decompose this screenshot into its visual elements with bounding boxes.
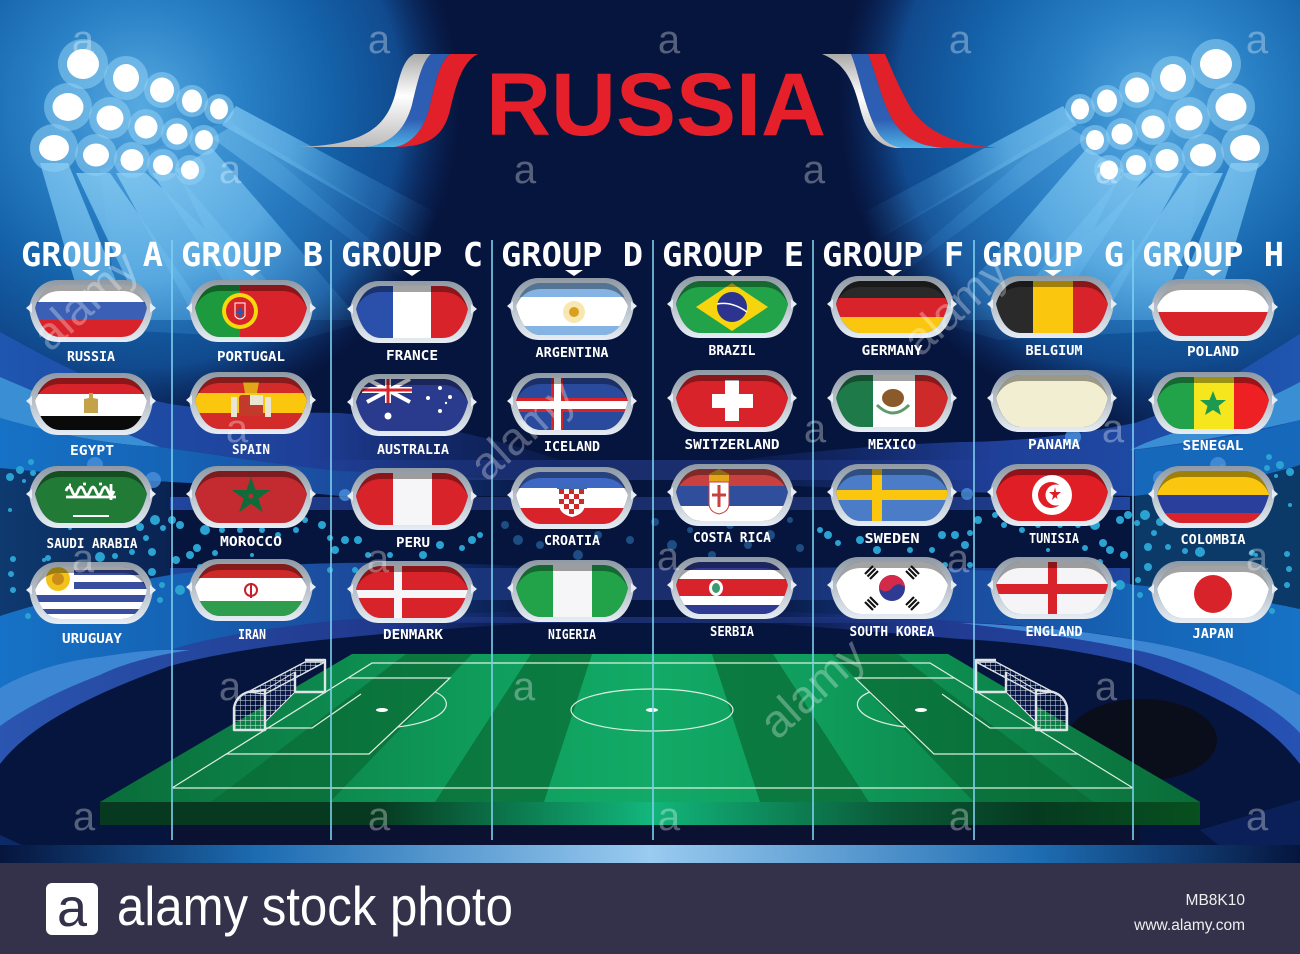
label: AUSTRALIA	[377, 443, 449, 458]
label: FRANCE	[386, 349, 438, 364]
left floodlight	[30, 39, 440, 340]
column: Group H	[1142, 235, 1284, 642]
pointer	[884, 270, 902, 276]
column: Group G	[982, 235, 1124, 640]
watermark grid: alamy	[892, 245, 1018, 365]
football pitch	[100, 654, 1217, 845]
heading: GROUP G	[982, 235, 1124, 274]
flag: Mexico	[827, 370, 957, 432]
flag: Iran	[186, 559, 316, 621]
right ribbon	[822, 54, 997, 148]
watermark grid: a	[73, 795, 96, 839]
label: IRAN	[238, 628, 266, 643]
flag: Egypt	[26, 373, 156, 435]
flag: Serbia	[667, 464, 797, 526]
label: SENEGAL	[1182, 439, 1244, 454]
label: SWEDEN	[864, 532, 920, 547]
watermark grid: a	[949, 18, 972, 62]
crowd dots left	[6, 459, 483, 619]
flag: Peru	[347, 468, 477, 530]
label: ICELAND	[544, 440, 600, 455]
turf	[100, 654, 1200, 802]
watermark grid: a	[803, 148, 826, 192]
label: SOUTH KOREA	[850, 625, 935, 640]
watermark grid: a	[658, 795, 681, 839]
pitch under-shadow strip	[170, 825, 1140, 845]
watermark grid: a	[1246, 795, 1269, 839]
label: URUGUAY	[62, 632, 122, 647]
watermark grid: a	[1102, 407, 1125, 451]
watermark grid: a	[1095, 665, 1118, 709]
label: POLAND	[1187, 345, 1239, 360]
turf stripes	[211, 654, 1093, 802]
flag: Spain	[186, 372, 316, 434]
crowd dots centre	[501, 517, 804, 560]
heading: GROUP A	[21, 235, 163, 274]
label: COSTA RICA	[693, 531, 771, 546]
watermark grid: a	[1095, 148, 1118, 192]
flag: Morocco	[186, 466, 316, 528]
pointer	[1204, 270, 1222, 276]
watermark grid: alamy	[459, 370, 585, 490]
pitch markings	[172, 663, 1133, 788]
flag: Nigeria	[507, 560, 637, 622]
dark shadow ellipse	[1067, 699, 1217, 781]
watermark grid: alamy	[749, 628, 875, 748]
watermark grid: a	[226, 407, 249, 451]
watermark grid: a	[949, 795, 972, 839]
flag: England	[987, 557, 1117, 619]
pointer	[1044, 270, 1062, 276]
heading: GROUP H	[1142, 235, 1284, 274]
flag: South Korea	[827, 557, 957, 619]
column: Group A	[21, 235, 163, 647]
label: TUNISIA	[1029, 532, 1079, 547]
label: SPAIN	[232, 443, 270, 458]
title: Russia with ribbons	[299, 54, 997, 154]
watermark grid: a	[368, 18, 391, 62]
column: Group E	[662, 235, 804, 640]
label: EGYPT	[70, 444, 114, 459]
watermark grid: a	[367, 537, 390, 581]
pointer	[403, 270, 421, 276]
label: BELGIUM	[1026, 344, 1083, 359]
pointer	[82, 270, 100, 276]
label: PERU	[396, 536, 430, 551]
wordmark: alamy stock photo	[117, 875, 513, 937]
watermark grid: a	[657, 535, 680, 579]
watermark grid: a	[219, 148, 242, 192]
label: MOROCCO	[220, 535, 282, 550]
flag: Australia	[347, 374, 477, 436]
label: COLOMBIA	[1180, 533, 1246, 548]
label: NIGERIA	[548, 628, 596, 643]
label: BRAZIL	[708, 344, 756, 359]
crowd dots right	[817, 454, 1294, 614]
label: RUSSIA	[67, 350, 115, 365]
heading: GROUP C	[341, 235, 483, 274]
flag: Argentina	[507, 278, 637, 340]
flag: Uruguay	[26, 562, 156, 624]
watermark grid: a	[72, 18, 95, 62]
flag: Senegal	[1148, 372, 1278, 434]
label: PORTUGAL	[217, 350, 285, 365]
logo	[46, 878, 98, 938]
flag: Iceland	[507, 373, 637, 435]
flag: Denmark	[347, 561, 477, 623]
flag: Croatia	[507, 467, 637, 529]
flag: Colombia	[1148, 466, 1278, 528]
flag: Poland	[1148, 279, 1278, 341]
heading: GROUP D	[501, 235, 643, 274]
group dividers	[172, 240, 1133, 840]
watermark grid: a	[1246, 18, 1269, 62]
heading text: RUSSIA	[486, 54, 826, 154]
label: GERMANY	[862, 344, 923, 359]
watermark grid: a	[514, 148, 537, 192]
bottom light strip	[0, 845, 1300, 863]
flag: Saudi Arabia	[26, 466, 156, 528]
label: CROATIA	[544, 534, 600, 549]
watermark grid: a	[1246, 535, 1269, 579]
watermark grid: alamy	[22, 240, 148, 360]
column: Group D	[501, 235, 643, 643]
label: SAUDI ARABIA	[46, 537, 138, 552]
penalty and centre spots	[376, 708, 927, 712]
watermark grid: a	[72, 537, 95, 581]
footer bar	[0, 863, 1300, 954]
logo: a	[57, 878, 88, 938]
watermark grid: a	[219, 665, 242, 709]
watermark grid: a	[804, 407, 827, 451]
watermark grid: a	[368, 795, 391, 839]
label: PANAMA	[1028, 438, 1080, 453]
pointer	[724, 270, 742, 276]
flag: Portugal	[186, 280, 316, 342]
watermark grid: a	[947, 537, 970, 581]
heading: GROUP B	[181, 235, 323, 274]
label: ARGENTINA	[536, 346, 609, 361]
label: SWITZERLAND	[684, 438, 780, 453]
left ribbon	[299, 54, 478, 147]
flag: Panama (blank)	[987, 370, 1117, 432]
watermark grid: a	[513, 665, 536, 709]
label: JAPAN	[1192, 627, 1234, 642]
pitch front slab	[100, 802, 1200, 825]
right goal	[976, 660, 1067, 730]
flag: Belgium	[987, 276, 1117, 338]
flag: Japan	[1148, 561, 1278, 623]
image id: MB8K10	[1186, 892, 1245, 909]
flag: Sweden	[827, 464, 957, 526]
website: www.alamy.com	[1133, 917, 1245, 934]
heading: GROUP E	[662, 235, 804, 274]
flag: France	[347, 281, 477, 343]
pointer	[243, 270, 261, 276]
column: Group C	[341, 235, 483, 643]
column: Group F	[822, 235, 964, 640]
flag: Costa Rica	[667, 557, 797, 619]
flag: Tunisia	[987, 464, 1117, 526]
flag: Germany	[827, 276, 957, 338]
flag: Brazil	[667, 276, 797, 338]
left goal	[234, 660, 325, 730]
heading: GROUP F	[822, 235, 964, 274]
label: ENGLAND	[1026, 625, 1083, 640]
label: SERBIA	[710, 625, 754, 640]
label: MEXICO	[868, 438, 916, 453]
right floodlight	[859, 39, 1269, 340]
watermark grid: a	[658, 18, 681, 62]
label: DENMARK	[383, 628, 443, 643]
pointer	[565, 270, 583, 276]
flag: Switzerland	[667, 370, 797, 432]
large crowd bubbles	[87, 429, 1226, 501]
flag: Russia	[26, 280, 156, 342]
column: Group B	[181, 235, 323, 643]
